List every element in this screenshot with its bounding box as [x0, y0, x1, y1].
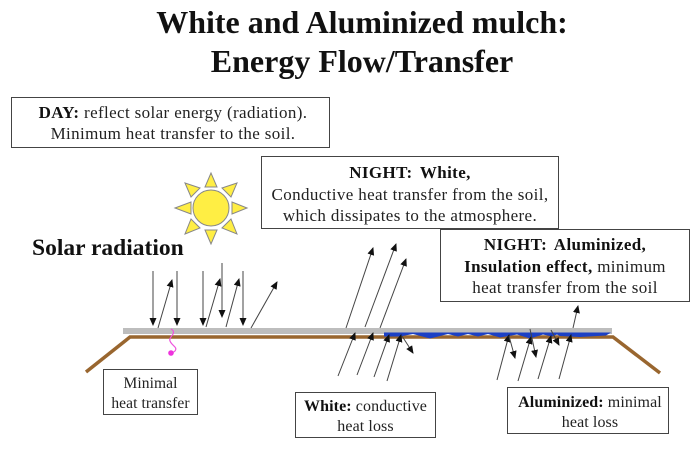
text: day callout: [11, 97, 330, 148]
text: white conductive heat loss: heat loss: [337, 418, 394, 435]
text: aluminized minimal heat loss: Aluminized: minimal: [518, 394, 662, 411]
arrows: aluminized mulch night: [497, 306, 578, 381]
text: night white callout: [261, 156, 559, 229]
text: white conductive heat loss: [295, 392, 436, 438]
arrows: white mulch night: [338, 244, 413, 381]
text: night white callout: which dissipates to the atmosphere.: [283, 206, 537, 225]
title: Energy Flow/Transfer: [211, 43, 513, 79]
arrows: day solar radiation: [153, 263, 277, 328]
text: night aluminized callout: Insulation effect, minimum: [464, 256, 666, 276]
text: night white callout: Conductive heat transfer from the soil,: [272, 184, 548, 204]
text: minimal heat transfer: Minimal: [123, 375, 178, 392]
text: night aluminized callout: NIGHT: Aluminized,: [484, 235, 646, 254]
text: day callout: DAY: reflect solar energy (radiation).: [39, 103, 307, 122]
mulch and soil surface: [86, 328, 660, 373]
text: day callout: Minimum heat transfer to the soil.: [51, 124, 295, 143]
text: minimal heat transfer: [103, 369, 198, 415]
text: solar radiation label: Solar radiation: [32, 235, 184, 261]
text: white conductive heat loss: White: conductive: [304, 398, 427, 415]
text: aluminized minimal heat loss: heat loss: [562, 414, 618, 431]
text: night white callout: NIGHT: White,: [349, 163, 471, 182]
text: minimal heat transfer: heat transfer: [111, 395, 190, 412]
icon: minimal heat transfer squiggle: [168, 329, 176, 356]
title: White and Aluminized mulch:: [156, 4, 568, 40]
text: night aluminized callout: [440, 229, 690, 302]
title: [156, 4, 568, 79]
icon: sun: [175, 173, 247, 244]
text: aluminized minimal heat loss: [507, 387, 669, 434]
text: night aluminized callout: heat transfer from the soil: [472, 278, 658, 297]
